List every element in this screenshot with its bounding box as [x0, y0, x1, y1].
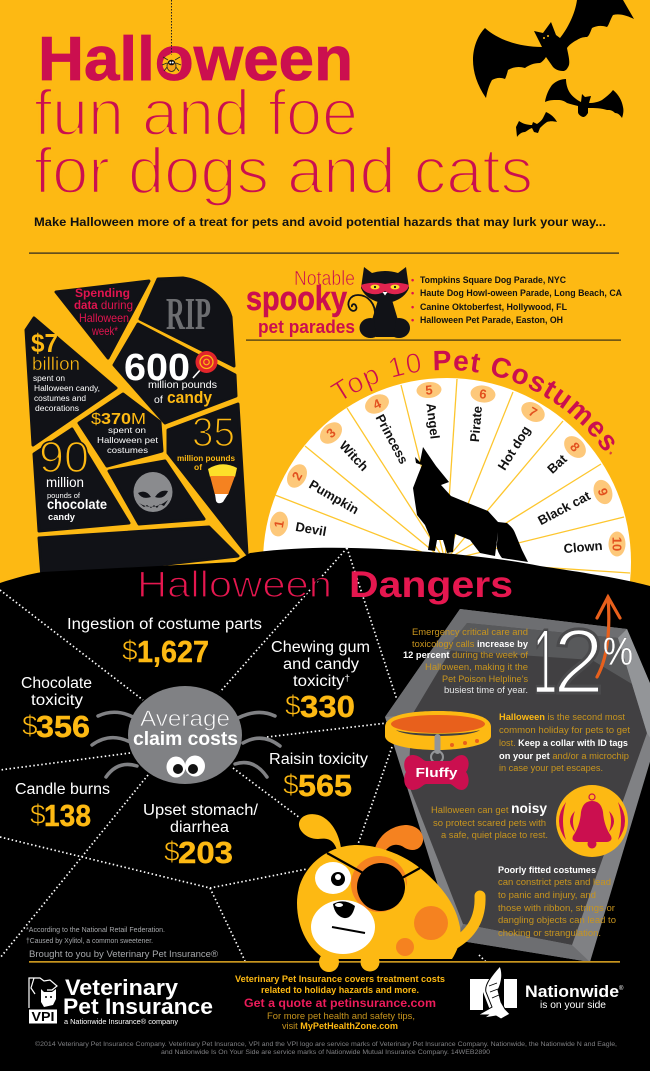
spending data heading: Halloween — [79, 311, 129, 325]
heading: Halloween Dangers: Dangers — [349, 564, 513, 605]
icon: orange up arrow — [597, 597, 620, 677]
icon: skull pumpkin — [134, 472, 172, 512]
stat: 35 million pounds candy corn: million pounds — [177, 453, 235, 463]
parade list: • — [411, 288, 414, 298]
stat: $370M pet costumes — [91, 411, 159, 455]
claim: chocolate toxicity: 356 — [36, 709, 90, 744]
wheel costume labels: Devil — [294, 519, 328, 539]
logo: Veterinary Pet Insurance: Pet Insurance — [63, 994, 213, 1019]
claim: candle burns: $ — [30, 799, 46, 830]
claim: chewing gum and candy toxicity: Chewing gum — [271, 639, 370, 656]
legal text: and Nationwide Is On Your Side are service marks of Nationwide Mutual Insurance Company. 14WEB2890 — [161, 1049, 491, 1056]
tip: emergency calls: Pet Poison Helpline’s — [442, 674, 528, 684]
icon: collar with Fluffy tag: Fluffy — [416, 765, 458, 780]
wheel numbers: 10 — [610, 537, 624, 551]
stat: 90 million pounds chocolate: million — [46, 475, 84, 490]
claim: chewing gum and candy toxicity: toxicity — [293, 673, 340, 690]
claim: upset stomach: $ — [164, 836, 180, 867]
tip: collar and ID tags: in case your pet escapes. — [499, 763, 603, 774]
claim: costume parts: 1,627 — [137, 634, 209, 669]
footer call to action: Veterinary Pet Insurance covers treatment costs — [235, 974, 445, 985]
stat: 90 million pounds chocolate: candy — [48, 512, 76, 523]
wheel numbers: 2 — [289, 469, 305, 483]
wheel numbers: 5 — [425, 382, 433, 398]
wheel costume labels: Pumpkin — [306, 477, 362, 517]
spending data heading: data during — [74, 298, 133, 312]
wheel costume labels: Witch — [336, 438, 372, 474]
title — [34, 25, 533, 207]
stat: $7 billion — [31, 328, 100, 413]
tip: poorly fitted costumes: choking or strangulation. — [498, 928, 601, 939]
black hill background — [0, 548, 650, 1071]
logo: Veterinary Pet Insurance: Veterinary — [65, 975, 179, 1000]
footnotes: *According to the National Retail Federation. — [26, 927, 165, 934]
footer call to action: Get a quote at petinsurance.com — [244, 996, 436, 1010]
stat: 600 million pounds of candy: of — [154, 394, 163, 406]
logo: Nationwide — [470, 966, 624, 1019]
icon: average claim costs spider: Average — [140, 706, 230, 731]
logo: Nationwide: ® — [619, 985, 624, 992]
wheel costume labels: Bat — [544, 451, 570, 477]
stat: $7 billion: Halloween candy, — [34, 384, 100, 393]
stat: $7 billion: decorations — [35, 404, 79, 413]
wheel costume labels: Clown — [563, 538, 603, 556]
claim: costume parts — [67, 616, 262, 669]
wheel numbers: 6 — [478, 386, 488, 402]
stat: 12 percent: 1 — [533, 611, 557, 713]
claim: chocolate toxicity — [21, 675, 92, 744]
spending data heading: Spending — [75, 286, 130, 300]
subtitle: Make Halloween more of a treat for pets and avoid potential hazards that may lurk your way... — [34, 217, 606, 229]
tip: noisy — [431, 800, 548, 841]
footer call to action: related to holiday hazards and more. — [261, 985, 419, 996]
tip: emergency calls: Halloween, making it the — [425, 662, 528, 672]
wheel numbers: 4 — [371, 395, 384, 412]
parade list: Tompkins Square Dog Parade, NYC — [420, 275, 566, 285]
claim: candle burns: 138 — [44, 798, 91, 833]
stat: 12 percent — [533, 611, 633, 713]
heading: Halloween Dangers — [137, 564, 513, 605]
stat: $7 billion: $7 — [31, 328, 58, 358]
claim: chewing gum and candy toxicity: 330 — [300, 689, 355, 724]
wheel costume labels: Black cat — [535, 488, 593, 528]
icon: bats — [473, 0, 634, 137]
claim: costume parts: $ — [122, 635, 138, 666]
logo: Veterinary Pet Insurance: VPI — [32, 1010, 54, 1024]
claim: chocolate toxicity: toxicity — [31, 692, 83, 709]
panel: top 10 pet costumes wheel — [263, 350, 631, 582]
icon: collar with Fluffy tag — [385, 711, 491, 790]
icon: average claim costs spider: claim costs — [133, 729, 238, 750]
claim: chocolate toxicity: $ — [22, 710, 38, 741]
parade list: Canine Oktoberfest, Hollywood, FL — [420, 302, 567, 312]
stat: $370M pet costumes: costumes — [107, 445, 148, 455]
panel: coffin with safety tips — [385, 597, 650, 962]
parades heading: Notable — [294, 268, 355, 290]
parade list: Haute Dog Howl-oween Parade, Long Beach, CA — [420, 288, 622, 298]
wheel number badges — [268, 381, 626, 556]
logo: Nationwide: Nationwide — [525, 982, 619, 1001]
icon: howling dog silhouette — [413, 447, 528, 562]
stat: 600 million pounds of candy: million pounds — [148, 379, 217, 391]
tip: poorly fitted costumes: to panic and injury, and — [498, 890, 596, 901]
claim: candle burns: Candle burns — [15, 781, 110, 798]
spending data heading — [74, 286, 133, 338]
claim: chewing gum and candy toxicity: $ — [285, 690, 301, 721]
tip: noisy: a safe, quiet place to rest. — [441, 830, 548, 841]
claim: candle burns — [15, 781, 110, 833]
tip: poorly fitted costumes: those with ribbon, strings or — [498, 903, 616, 914]
claim: raisin toxicity: 565 — [298, 768, 352, 803]
stat: 600 million pounds of candy: candy — [167, 388, 212, 407]
claim: chewing gum and candy toxicity — [271, 639, 370, 724]
title: fun and foe — [34, 76, 358, 149]
stat: 90 million pounds chocolate: pounds of — [47, 491, 81, 500]
claim: chocolate toxicity: Chocolate — [21, 675, 92, 692]
wheel numbers: 8 — [567, 439, 583, 455]
logo: Veterinary Pet Insurance — [29, 975, 213, 1026]
wheel costume labels: Pirate — [467, 405, 485, 443]
claim: chewing gum and candy toxicity: † — [345, 673, 350, 683]
stat: 12 percent: 2 — [553, 611, 604, 713]
parade list: • — [411, 315, 414, 325]
stat: 35 million pounds candy corn — [177, 409, 235, 472]
wheel costume labels: Angel — [423, 402, 443, 440]
wheel heading: Top 10 Pet Costumes* — [330, 350, 614, 455]
claim: upset stomach: Upset stomach/ — [143, 802, 259, 819]
claim: costume parts: Ingestion of costume parts — [67, 616, 262, 633]
tip: collar and ID tags — [499, 712, 630, 774]
wheel numbers: 7 — [526, 404, 540, 420]
parade list: • — [411, 302, 414, 312]
claim: chewing gum and candy toxicity: and candy — [283, 656, 359, 673]
claim: upset stomach: 203 — [178, 835, 233, 870]
tip: poorly fitted costumes — [498, 865, 616, 939]
heading: Halloween Dangers: Halloween — [137, 564, 332, 605]
stat: 12 percent: % — [603, 631, 633, 674]
stat: 90 million pounds chocolate — [39, 433, 107, 523]
tip: noisy: so protect scared pets with — [433, 818, 546, 829]
stat: $7 billion: spent on — [33, 374, 65, 383]
tip: collar and ID tags: on your pet and/or a microchip — [499, 751, 629, 762]
tip: poorly fitted costumes: Poorly fitted costumes — [498, 865, 596, 876]
spider web lines — [0, 548, 486, 962]
icon: average claim costs spider — [92, 686, 280, 784]
stat: $370M pet costumes: Halloween pet — [97, 435, 159, 445]
tip: emergency calls — [403, 627, 529, 695]
tip: collar and ID tags: Halloween is the second most — [499, 712, 625, 723]
claim: upset stomach — [143, 802, 259, 870]
title: Halloween — [38, 25, 353, 94]
stat: 35 million pounds candy corn: of — [194, 462, 202, 472]
wheel numbers — [271, 382, 624, 551]
stat: 90 million pounds chocolate: 90 — [39, 433, 89, 482]
wheel costume labels: Princess — [373, 412, 411, 466]
icon: pirate dog — [297, 814, 480, 972]
footer call to action: visit MyPetHealthZone.com — [282, 1021, 398, 1032]
tip: emergency calls: Emergency critical care and — [412, 627, 528, 637]
parades heading — [246, 268, 355, 337]
wheel numbers: 3 — [323, 425, 339, 441]
claim: raisin toxicity — [269, 751, 368, 803]
wheel numbers: 9 — [595, 486, 611, 498]
parade list: Halloween Pet Parade, Easton, OH — [420, 315, 563, 325]
stat: 600 million pounds of candy: 600 — [124, 347, 190, 389]
footnotes: Brought to you by Veterinary Pet Insurance® — [29, 949, 218, 960]
panel: notable spooky pet parades — [246, 267, 622, 341]
wheel costume labels: Hot dog — [495, 423, 533, 473]
stat: $7 billion: costumes and — [34, 394, 86, 403]
tip: noisy: Halloween can get noisy — [431, 800, 547, 816]
stat: 600 million pounds of candy — [124, 347, 218, 407]
claim: upset stomach: diarrhea — [170, 819, 229, 836]
claim: raisin toxicity: Raisin toxicity — [269, 751, 368, 768]
icon: bell — [556, 785, 628, 857]
parade list: • — [411, 275, 414, 285]
footnotes: †Caused by Xylitol, a common sweetener. — [26, 938, 153, 945]
spending data heading: week* — [91, 324, 118, 338]
tip: poorly fitted costumes: can constrict pets and lead — [498, 877, 611, 888]
stat: 90 million pounds chocolate: chocolate — [47, 496, 107, 512]
tip: collar and ID tags: lost. Keep a collar with ID tags — [499, 738, 628, 749]
panel: tombstone spending data — [26, 278, 247, 578]
footer call to action: For more pet health and safety tips, — [267, 1011, 415, 1022]
parades heading: pet parades — [258, 317, 355, 337]
icon: hanging spider — [162, 0, 181, 74]
footer call to action — [235, 974, 445, 1032]
claim: raisin toxicity: $ — [283, 769, 299, 800]
wheel numbers: 1 — [271, 519, 287, 529]
stat: $7 billion: billion — [32, 354, 80, 374]
RIP engraving: RIP — [166, 288, 211, 339]
legal text — [35, 1040, 617, 1056]
tip: poorly fitted costumes: dangling objects can lead to — [498, 915, 616, 926]
stat: $370M pet costumes: $370M — [91, 411, 146, 428]
logo: Veterinary Pet Insurance: a Nationwide Insurance® company — [64, 1017, 178, 1026]
tip: emergency calls: toxicology calls increase by — [412, 639, 529, 649]
icon: candy corn — [208, 464, 237, 503]
title: for dogs and cats — [34, 134, 533, 207]
footnotes — [26, 927, 218, 960]
parades heading: spooky — [246, 280, 347, 318]
stat: $370M pet costumes: spent on — [108, 425, 146, 435]
icon: masked black cat — [348, 267, 410, 338]
tip: collar and ID tags: common holiday for pets to get — [499, 725, 630, 736]
logo: Nationwide: is on your side — [540, 1000, 606, 1011]
parade list — [411, 275, 622, 325]
wheel costume labels — [294, 402, 603, 556]
tip: emergency calls: busiest time of year. — [444, 685, 528, 695]
tip: emergency calls: 12 percent during the week of — [403, 650, 528, 660]
stat: 35 million pounds candy corn: 35 — [192, 409, 235, 455]
legal text: ©2014 Veterinary Pet Insurance Company. Veterinary Pet Insurance, VPI and the VPI logo are service marks of Veterinary Pet Insurance Company. Nationwide, the Nationwide N and Eagle, — [35, 1040, 617, 1048]
